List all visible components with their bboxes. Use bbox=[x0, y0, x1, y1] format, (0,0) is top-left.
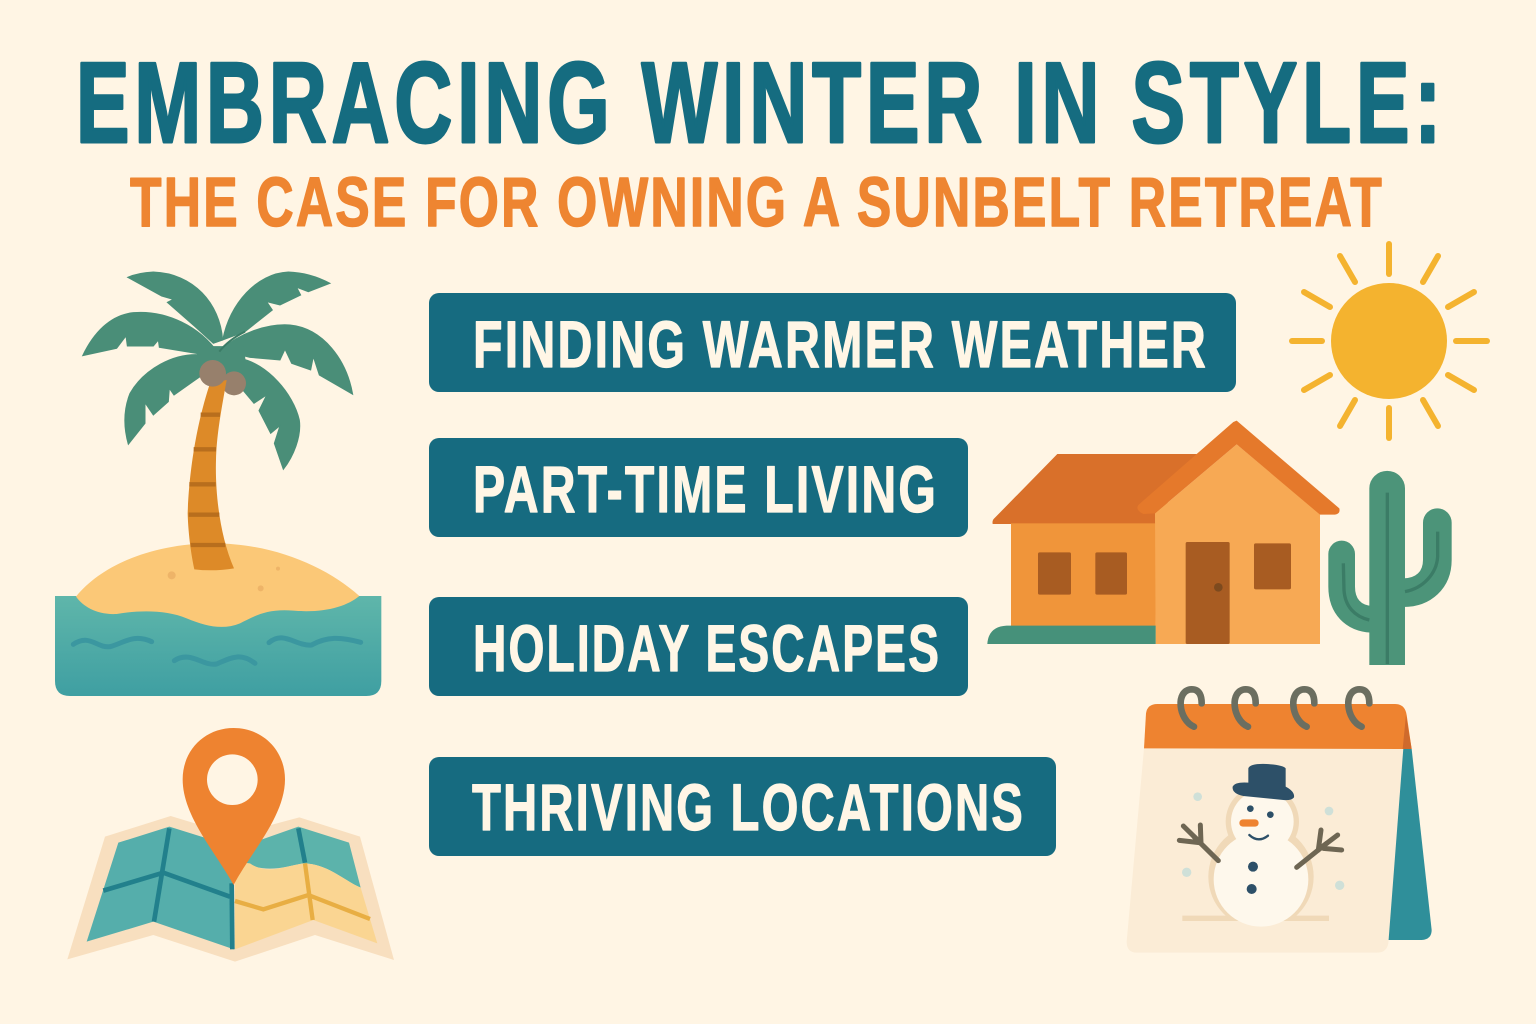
item: holiday escapes bbox=[429, 597, 968, 696]
icon: map with location pin bbox=[67, 728, 394, 962]
icon: house bbox=[987, 421, 1340, 644]
item: finding warmer weather bbox=[429, 293, 1236, 392]
item: holiday escapes: HOLIDAY ESCAPES bbox=[473, 611, 941, 685]
item: part-time living: PART-TIME LIVING bbox=[473, 452, 938, 526]
icon: sun bbox=[1292, 244, 1487, 438]
icon: calendar with snowman bbox=[1127, 689, 1432, 953]
item: part-time living bbox=[429, 438, 968, 537]
icon: palm tree island bbox=[55, 272, 381, 696]
icon: cactus bbox=[1342, 471, 1438, 665]
item: thriving locations bbox=[429, 757, 1056, 856]
item: thriving locations: THRIVING LOCATIONS bbox=[472, 770, 1025, 844]
item: finding warmer weather: FINDING WARMER WEATHER bbox=[473, 307, 1208, 381]
